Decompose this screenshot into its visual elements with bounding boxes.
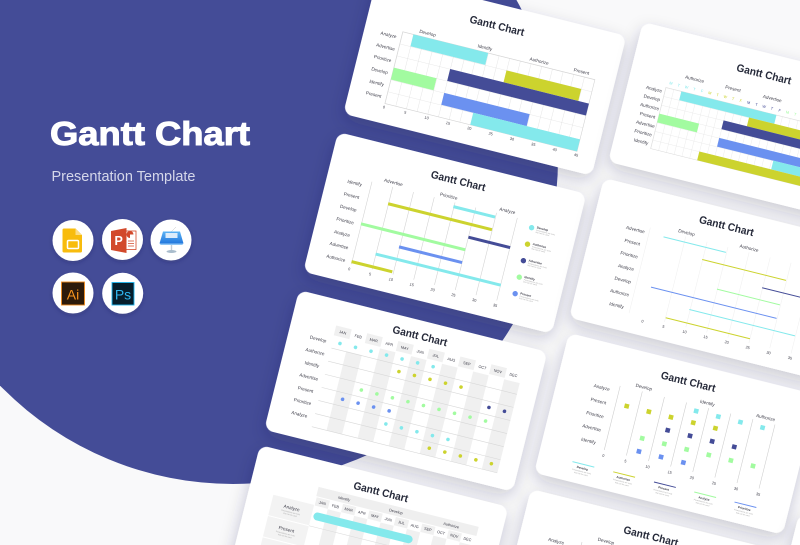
legend: that can be used xyxy=(736,511,750,518)
month labels: APR xyxy=(385,342,394,347)
row labels: Analyze xyxy=(291,410,308,419)
row labels xyxy=(289,334,329,419)
month cells: DEC xyxy=(463,537,472,542)
panel: gantt pill table xyxy=(225,445,508,545)
row labels: Prioritize xyxy=(620,250,639,260)
axis ticks: 0 xyxy=(348,267,351,271)
axis ticks: 10 xyxy=(682,330,687,335)
row labels: Present xyxy=(590,397,607,406)
weekday letters: M xyxy=(669,81,673,86)
dots xyxy=(318,341,513,466)
vertical guides xyxy=(351,182,517,300)
top labels: Develop xyxy=(678,228,696,237)
weekday letters: W xyxy=(723,95,728,100)
row labels: Present xyxy=(624,238,641,247)
row labels: Develop xyxy=(643,93,661,102)
weekday letters: M xyxy=(785,110,789,115)
month cells: JUN xyxy=(384,517,393,523)
gantt pill xyxy=(313,512,413,544)
row label cells: that can be used xyxy=(278,533,292,539)
month cells: APR xyxy=(358,510,366,516)
legend: Authorize xyxy=(532,242,547,249)
weekday letters: F xyxy=(739,99,743,103)
panel: gantt grid bars xyxy=(343,0,626,176)
weekday letters xyxy=(669,81,797,117)
axis ticks: 25 xyxy=(711,481,716,486)
row labels: Prioritize xyxy=(336,216,355,226)
weekday letters: T xyxy=(716,93,720,98)
month labels: DEC xyxy=(509,372,518,378)
legend: Presentations are tools xyxy=(523,278,543,286)
legend: that can be used xyxy=(574,471,588,477)
gantt lines xyxy=(645,237,800,352)
weekday letters: F xyxy=(700,89,704,94)
panel: gantt grid bars: Gantt Chart xyxy=(468,14,526,39)
row labels: Identify xyxy=(633,137,649,146)
row labels: Analyze xyxy=(646,85,663,94)
gantt lines xyxy=(352,186,516,298)
chart grid xyxy=(651,87,800,197)
axis ticks: 25 xyxy=(451,293,456,298)
icon: PowerPoint xyxy=(102,219,143,260)
axis ticks: 25 xyxy=(745,345,750,350)
legend: Identify xyxy=(524,275,536,282)
panel: gantt monthly dots: Gantt Chart xyxy=(391,324,449,349)
row label cells xyxy=(258,495,314,545)
legend: that can be used xyxy=(655,491,669,497)
panel: gantt thin lines: Gantt Chart xyxy=(698,214,755,239)
legend: Presentations are tools xyxy=(528,262,547,269)
subtitle: Presentation Template xyxy=(52,169,196,185)
row labels: Identify xyxy=(581,437,597,445)
top labels: Authorize xyxy=(685,74,705,84)
month labels: JUN xyxy=(416,349,425,355)
weekday letters: T xyxy=(794,112,797,117)
top labels xyxy=(685,74,783,103)
vertical guide xyxy=(566,542,582,545)
panel: gantt squares lower xyxy=(496,489,779,545)
top labels: Authorize xyxy=(529,56,550,66)
axis ticks: 45 xyxy=(573,153,579,158)
row label cells: Presentations are tools xyxy=(276,530,295,538)
row labels: Authorize xyxy=(305,347,325,357)
top labels xyxy=(678,228,800,268)
legend: Present xyxy=(658,485,670,492)
row lines xyxy=(312,348,517,473)
row labels: Identify xyxy=(609,301,625,310)
row labels: Advertise xyxy=(376,42,396,52)
blue circle backdrop xyxy=(0,0,558,484)
vertical guides xyxy=(604,386,775,489)
legend: that can be used xyxy=(535,231,550,237)
row labels: Advertise xyxy=(626,225,646,234)
axis ticks: 10 xyxy=(388,277,393,282)
legend: Presentations are tools xyxy=(572,468,591,475)
legend xyxy=(511,224,556,304)
icon: Keynote xyxy=(150,220,192,260)
axis ticks: 40 xyxy=(552,148,557,152)
row labels: Analyze xyxy=(593,383,611,392)
panel: gantt squares: Gantt Chart xyxy=(659,370,717,395)
row labels: Advertise xyxy=(635,119,656,129)
legend: Presentations are tools xyxy=(693,498,713,506)
top labels: Present xyxy=(725,84,742,93)
legend: Authorize xyxy=(616,475,631,482)
weekday letters: T xyxy=(731,97,735,101)
weekday letters: W xyxy=(684,85,689,90)
row labels: Identify xyxy=(369,79,385,87)
legend: Presentations are tools xyxy=(613,478,632,486)
top labels xyxy=(419,29,590,76)
legend: Advertise xyxy=(528,258,543,266)
icon: Illustrator: Ai xyxy=(67,286,79,302)
weekday letters: T xyxy=(755,103,759,107)
labels xyxy=(548,525,615,545)
axis ticks: 15 xyxy=(409,282,414,287)
month cells: FEB xyxy=(331,504,340,510)
top labels: Prioritize xyxy=(439,192,458,201)
axis ticks: 10 xyxy=(645,465,650,469)
axis ticks: 30 xyxy=(472,298,477,303)
axis ticks: 35 xyxy=(756,492,761,497)
axis ticks: 35 xyxy=(531,142,536,147)
top labels: Present xyxy=(573,67,590,76)
row labels: Prioritize xyxy=(293,397,312,406)
axis ticks: 30 xyxy=(766,351,771,355)
row labels: Prioritize xyxy=(586,410,605,419)
row labels: Identify xyxy=(304,360,320,369)
row labels: Develop xyxy=(371,66,389,75)
top labels: Develop xyxy=(635,383,653,392)
legend: Present xyxy=(520,291,532,298)
month labels: JUL xyxy=(432,353,440,359)
axis ticks: 20 xyxy=(689,476,694,480)
row labels: Present xyxy=(343,191,360,200)
legend: Presentations are tools xyxy=(532,245,551,253)
panel: gantt monthly dots xyxy=(264,290,547,492)
row labels xyxy=(579,383,612,446)
row labels: Develop xyxy=(614,276,632,285)
gantt bars xyxy=(385,32,595,151)
gantt bars xyxy=(651,87,800,197)
top labels xyxy=(384,178,516,215)
panel: gantt weekly grid xyxy=(608,22,800,224)
weekday letters: T xyxy=(770,107,774,111)
month cells: NOV xyxy=(450,533,459,539)
panel: far-right card edge xyxy=(764,514,800,545)
vertical guides xyxy=(629,228,800,353)
row labels: Authorize xyxy=(640,102,660,112)
title: Gantt Chart xyxy=(50,115,250,152)
panel: gantt squares xyxy=(534,333,800,535)
legend: Presentations are tools xyxy=(734,508,753,516)
phase header band xyxy=(316,487,479,536)
row label cells: Analyze xyxy=(283,504,301,513)
row labels xyxy=(364,30,399,99)
row labels: Identify xyxy=(347,179,363,187)
icon: Google Slides xyxy=(52,220,94,261)
weekday letters: T xyxy=(693,87,696,92)
row labels: Authorize xyxy=(610,288,630,298)
weekday letters: M xyxy=(708,91,712,96)
axis ticks: 5 xyxy=(624,459,627,464)
month labels: NOV xyxy=(493,369,503,375)
legend: Presentations are tools xyxy=(653,488,673,496)
legend: that can be used xyxy=(527,264,541,270)
phase header band: Identify xyxy=(338,496,351,502)
row line xyxy=(309,526,473,545)
row labels: Analyze xyxy=(380,30,398,39)
legend: Presentations are tools xyxy=(536,229,555,236)
top labels: Advertise xyxy=(762,94,783,103)
row label cells: Present xyxy=(278,525,295,534)
axis ticks: 35 xyxy=(493,303,498,308)
row labels: Present xyxy=(639,111,657,120)
panel: gantt weekly grid: Gantt Chart xyxy=(735,62,793,87)
legend: that can be used xyxy=(615,481,629,487)
panel: gantt thick lines: Gantt Chart xyxy=(429,169,487,194)
axis ticks: 20 xyxy=(724,340,729,345)
legend: Develop xyxy=(576,465,589,472)
row labels: Advertise xyxy=(582,423,602,433)
row labels: Develop xyxy=(309,335,327,344)
row label cells: Presentations are tools xyxy=(281,509,300,516)
icon: Illustrator xyxy=(52,272,94,314)
month cells: OCT xyxy=(437,530,446,536)
top labels: Advertise xyxy=(384,178,404,187)
top labels: Analyze xyxy=(499,206,516,215)
top labels: Identify xyxy=(700,399,716,407)
axis ticks: 30 xyxy=(733,487,739,491)
icon: Photoshop: Ps xyxy=(115,286,131,302)
top labels: Authorize xyxy=(756,413,776,422)
row labels: Advertise xyxy=(329,241,349,250)
row labels xyxy=(607,225,646,310)
axis ticks: 10 xyxy=(424,116,429,120)
month labels: JAN xyxy=(339,330,347,336)
month cells: JAN xyxy=(318,500,326,506)
chart grid xyxy=(385,32,595,151)
top labels: Develop xyxy=(419,29,437,38)
row label cells: that can be used xyxy=(283,512,297,518)
row labels xyxy=(631,84,665,146)
column bands xyxy=(311,326,522,473)
legend: Prioritize xyxy=(738,505,751,512)
top labels xyxy=(635,383,776,422)
icon: Photoshop xyxy=(102,273,143,314)
axis ticks: 20 xyxy=(467,126,472,131)
axis ticks: 15 xyxy=(445,121,450,126)
axis ticks xyxy=(382,105,579,158)
legend: Develop xyxy=(536,225,549,232)
legend: Analyze xyxy=(698,495,710,502)
axis ticks: 0 xyxy=(641,319,644,324)
phase header band: Develop xyxy=(389,508,403,515)
legend: that can be used xyxy=(523,280,537,287)
month cells: MAY xyxy=(371,514,380,519)
axis ticks: 15 xyxy=(703,335,708,340)
month labels: FEB xyxy=(354,334,363,340)
row labels: Develop xyxy=(340,204,358,213)
month labels: MAY xyxy=(400,345,410,351)
row labels: Present xyxy=(365,90,383,99)
month cells xyxy=(298,497,475,545)
weekday letters: T xyxy=(677,83,681,88)
month cells: JUL xyxy=(398,520,405,526)
axis ticks: 5 xyxy=(404,111,407,115)
month labels xyxy=(339,330,518,378)
axis ticks: 30 xyxy=(509,137,515,142)
panel: gantt thin lines xyxy=(569,178,800,380)
row labels: Prioritize xyxy=(634,128,653,138)
legend: that can be used xyxy=(519,297,533,303)
legend: that can be used xyxy=(531,247,545,254)
legend xyxy=(570,462,756,519)
top labels: Authorize xyxy=(739,243,760,253)
phase header band: Authorize xyxy=(443,522,459,530)
row labels: Analyze xyxy=(617,263,635,272)
axis ticks: 0 xyxy=(382,105,385,110)
panel: gantt pill table: Gantt Chart xyxy=(352,480,410,505)
axis ticks xyxy=(641,319,792,361)
top labels: Identify xyxy=(477,43,493,52)
axis ticks xyxy=(348,267,498,308)
row labels: Prioritize xyxy=(373,54,392,63)
axis ticks: 20 xyxy=(430,288,435,293)
month labels: SEP xyxy=(463,361,471,367)
axis ticks: 0 xyxy=(602,454,605,458)
month labels: AUG xyxy=(447,357,456,363)
axis ticks: 15 xyxy=(667,470,672,475)
axis ticks: 5 xyxy=(368,272,371,277)
legend: Presentations are tools xyxy=(519,295,539,302)
month cells: AUG xyxy=(410,523,419,529)
row labels xyxy=(326,178,365,263)
month labels: OCT xyxy=(478,365,487,371)
axis ticks xyxy=(602,454,761,497)
row labels: Analyze xyxy=(334,229,351,238)
weekday letters: W xyxy=(762,104,767,109)
axis ticks: 35 xyxy=(787,356,792,361)
axis ticks: 25 xyxy=(488,132,493,136)
month cells: SEP xyxy=(424,527,432,533)
legend: that can be used xyxy=(695,501,710,508)
axis ticks: 5 xyxy=(662,325,665,329)
weekday letters: M xyxy=(747,101,751,105)
month cells: MAR xyxy=(344,507,353,513)
row labels: Authorize xyxy=(326,253,346,263)
month labels: MAR xyxy=(369,338,379,344)
icon: PowerPoint: P xyxy=(114,234,123,248)
panel: gantt thick lines xyxy=(303,132,586,334)
row labels: Advertise xyxy=(299,372,319,382)
weekday letters: F xyxy=(778,108,782,113)
row labels: Present xyxy=(297,385,315,394)
squares xyxy=(614,392,765,482)
